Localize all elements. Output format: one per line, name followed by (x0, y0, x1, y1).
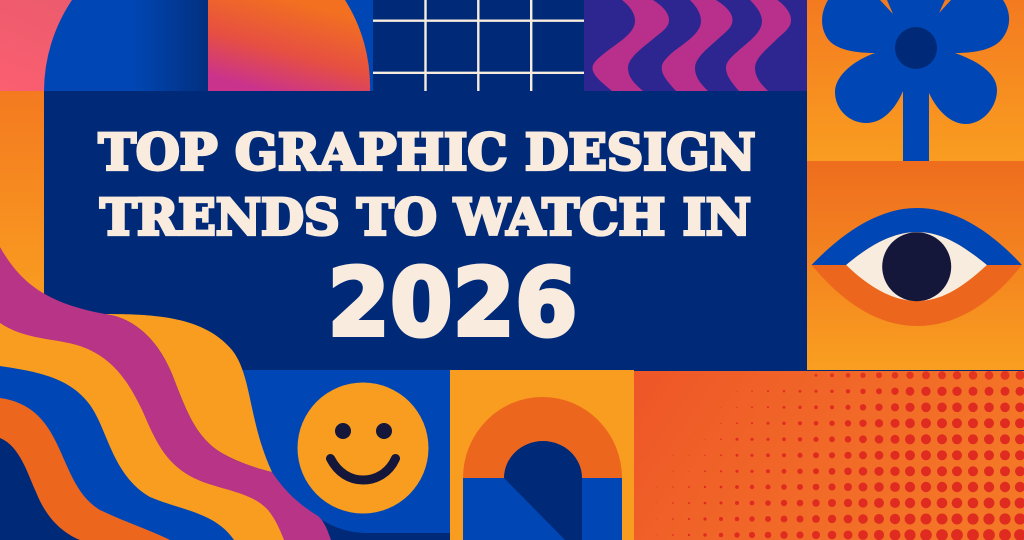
panel: smiley background (240, 370, 450, 540)
heading line 2: TRENDS TO WATCH IN (100, 188, 751, 246)
icon: pupil (882, 232, 951, 301)
heading line 1: TOP GRAPHIC DESIGN (98, 122, 756, 182)
icon: eye upper lid (812, 208, 1022, 265)
panel: pink and blue arch (0, 0, 208, 91)
icon: blue base (463, 478, 622, 540)
panel: eye (807, 161, 1024, 370)
icon: navy doorway (504, 441, 582, 540)
icon: eye lower lid (812, 265, 1022, 326)
icon: eye white (846, 232, 987, 301)
title (98, 122, 756, 358)
panel: flower (807, 0, 1024, 161)
panel: grid lines (373, 0, 584, 91)
panel: left orange strip (0, 91, 44, 306)
panel: layered waves (0, 247, 331, 540)
panel: arch (450, 370, 634, 540)
icon: smiley face (298, 382, 428, 514)
panel: halftone dots (634, 371, 1024, 540)
heading year: 2026 (328, 249, 578, 358)
panel: sunset quarter circle (208, 0, 373, 91)
panel: magenta waves (584, 0, 807, 91)
panel: navy title background (44, 91, 807, 370)
icon: orange arch (463, 397, 622, 478)
icon: flower centre (895, 27, 937, 69)
icon: flower petals and stem (822, 0, 1009, 161)
